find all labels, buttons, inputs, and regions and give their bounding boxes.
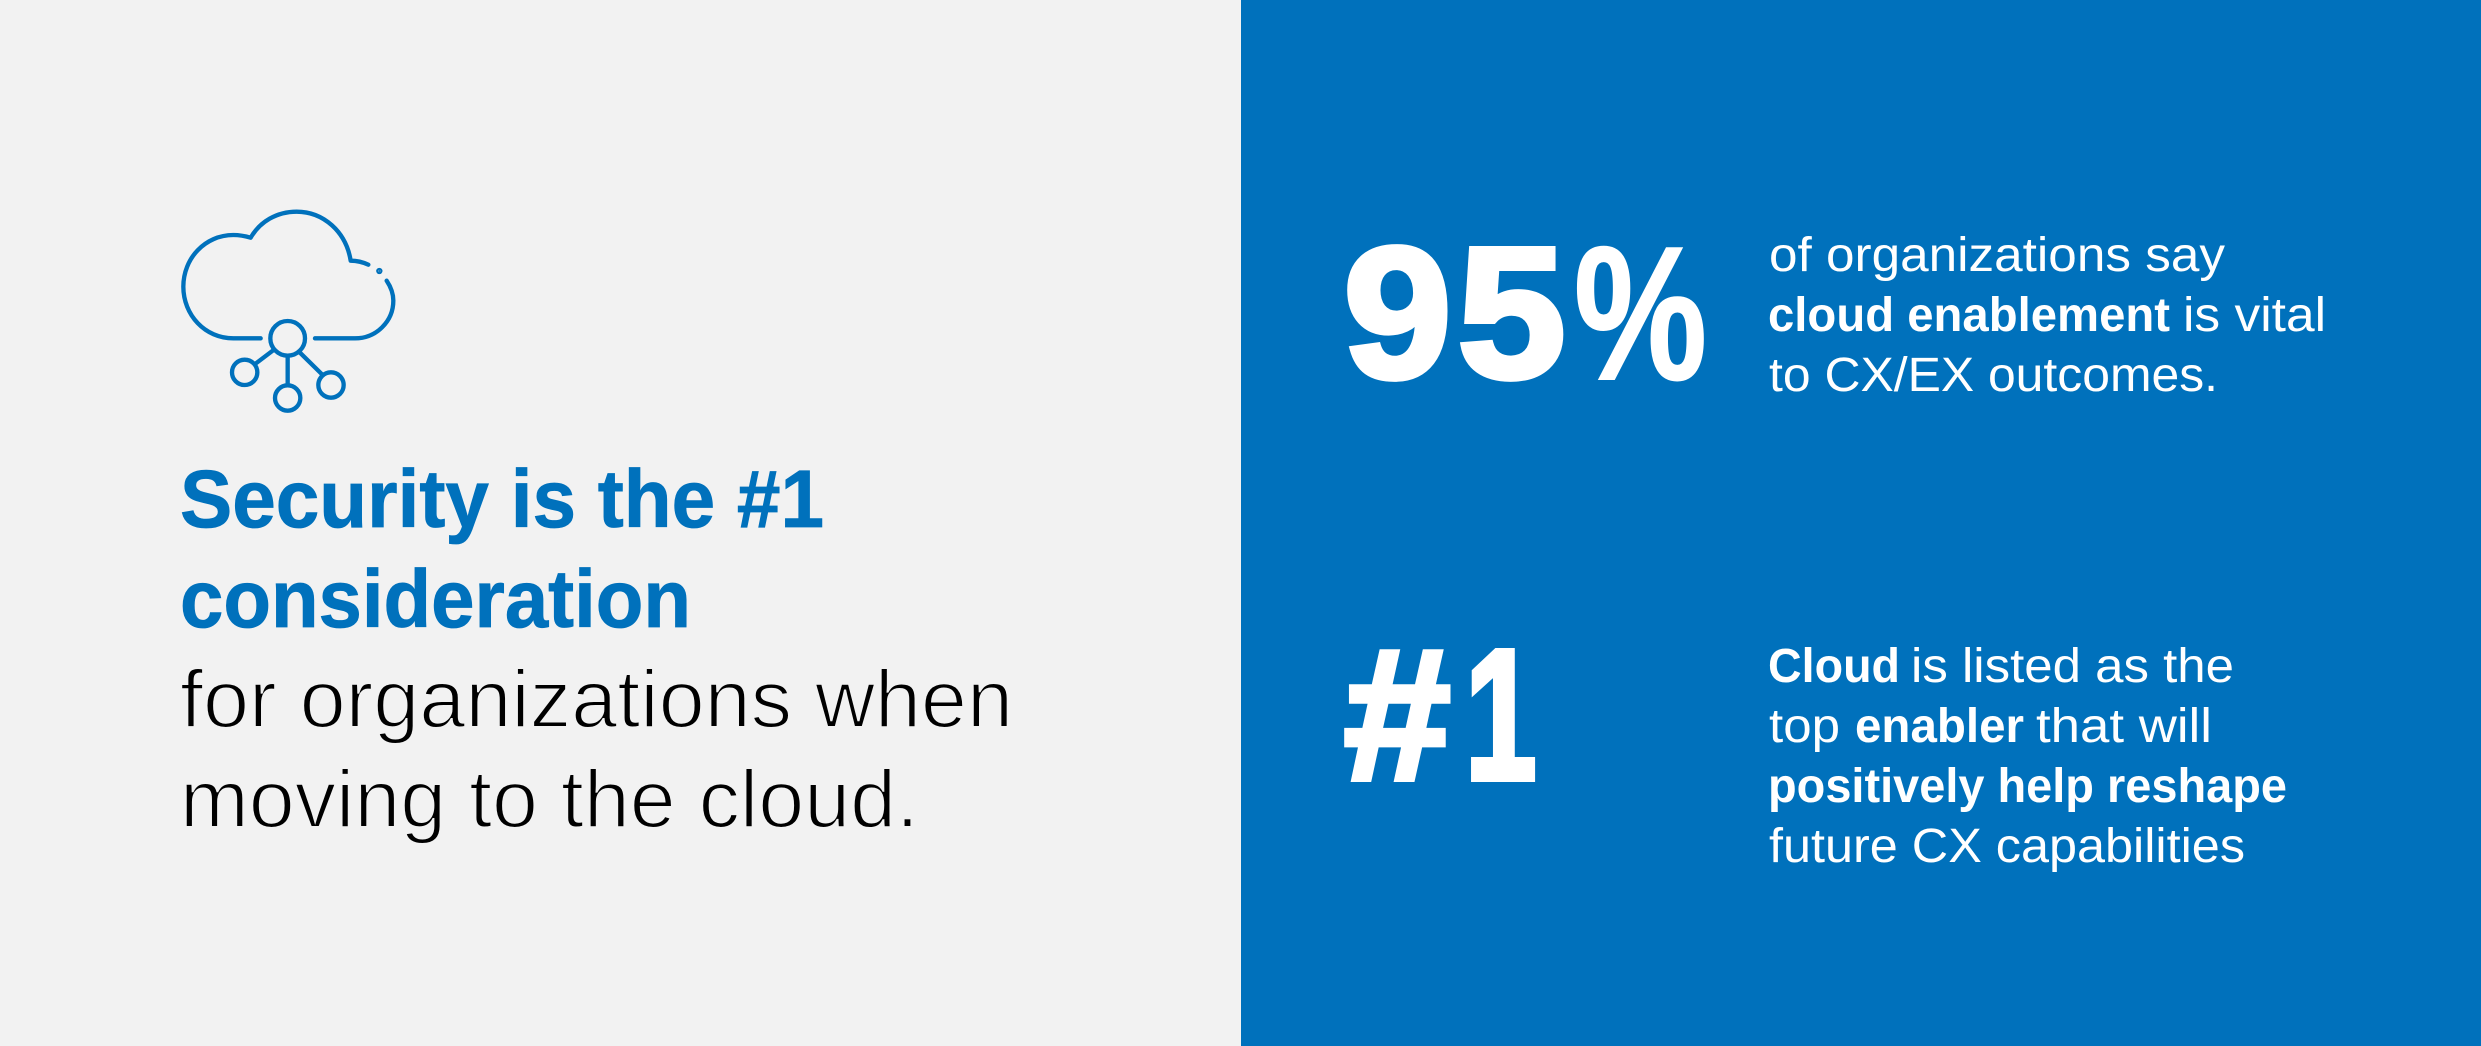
stat: 95 percent: 5	[1458, 210, 1566, 417]
text block: cloud enablement	[1768, 229, 2326, 402]
text block: cloud top enabler: top	[1769, 700, 1840, 753]
stat: number one: #	[1344, 612, 1450, 819]
heading: security statement: for organizations when	[180, 654, 1013, 745]
stat: 95 percent	[1344, 208, 1707, 420]
text block: cloud top enabler: is listed as the	[1911, 640, 2234, 693]
heading: security statement: moving to the cloud.	[180, 754, 919, 845]
text block: cloud enablement: cloud enablement	[1768, 289, 2170, 342]
text block: cloud enablement: of organizations say	[1769, 229, 2225, 282]
text block: cloud enablement: is vital	[2183, 289, 2326, 342]
text block: cloud top enabler: that will	[2036, 700, 2212, 753]
panel: right blue background	[1241, 0, 2481, 1046]
text block: cloud enablement: to CX/EX outcomes.	[1769, 349, 2218, 402]
stat: 95 percent: %	[1574, 208, 1707, 420]
text block: cloud top enabler: positively help reshape	[1768, 760, 2287, 813]
text block: cloud top enabler: enabler	[1855, 700, 2024, 753]
heading: security statement	[180, 454, 1013, 845]
stat: number one	[1344, 612, 1537, 819]
text block: cloud top enabler: Cloud	[1768, 640, 1900, 693]
text block: cloud top enabler: future CX capabilities	[1769, 820, 2245, 873]
stat: 95 percent: 9	[1344, 210, 1452, 417]
text block: cloud top enabler	[1768, 640, 2287, 873]
heading: security statement: consideration	[180, 554, 691, 645]
icon: cloud with network nodes	[183, 212, 393, 411]
stat: number one: 1	[1465, 612, 1537, 819]
panel: left grey background	[0, 0, 1241, 1046]
heading: security statement: Security is the #1	[180, 454, 824, 545]
